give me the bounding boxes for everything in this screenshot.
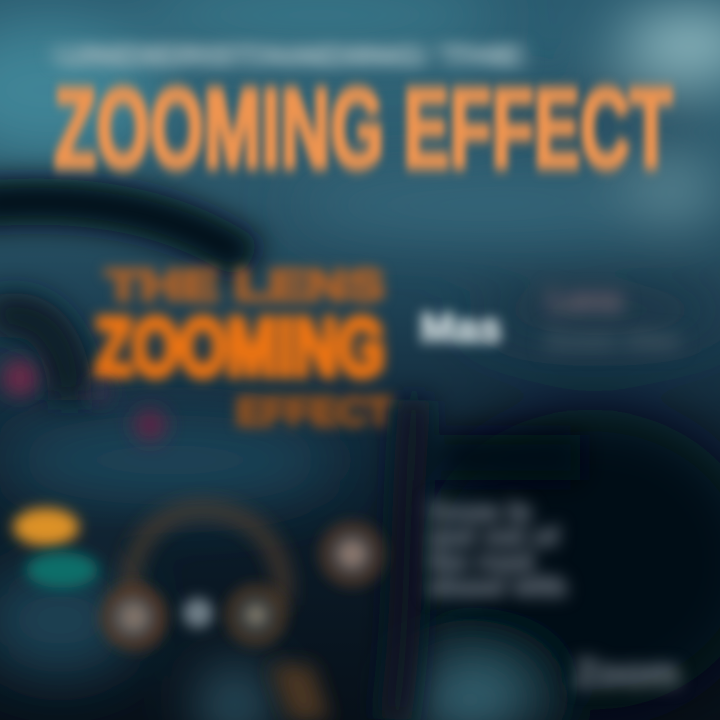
label small line: THE LENS — [106, 261, 384, 310]
footer text: Zoom — [574, 653, 680, 695]
dashboard orange label — [84, 259, 400, 435]
side dashboard text lower: Zoom view — [545, 325, 679, 355]
gauge: right dial — [231, 590, 281, 640]
steering wheel arc — [0, 202, 580, 720]
gauge: far right dial — [325, 527, 379, 581]
subtitle: UNDERSTANDING THE — [56, 40, 524, 73]
icon: orange indicator — [13, 508, 79, 546]
gauge: left dial — [107, 590, 161, 644]
icon: teal indicator — [26, 552, 98, 588]
gauge: center dial — [183, 598, 213, 628]
label main word: ZOOMING — [95, 302, 385, 393]
gauge ring — [130, 509, 283, 605]
icon: red indicators — [2, 360, 166, 441]
label lower line: EFFECT — [236, 390, 392, 434]
white label: Mas — [420, 304, 502, 351]
arrow: lower orange wedge — [270, 665, 330, 720]
title: ZOOMING EFFECT — [54, 66, 672, 191]
side dashboard text: Lens — [548, 282, 623, 318]
